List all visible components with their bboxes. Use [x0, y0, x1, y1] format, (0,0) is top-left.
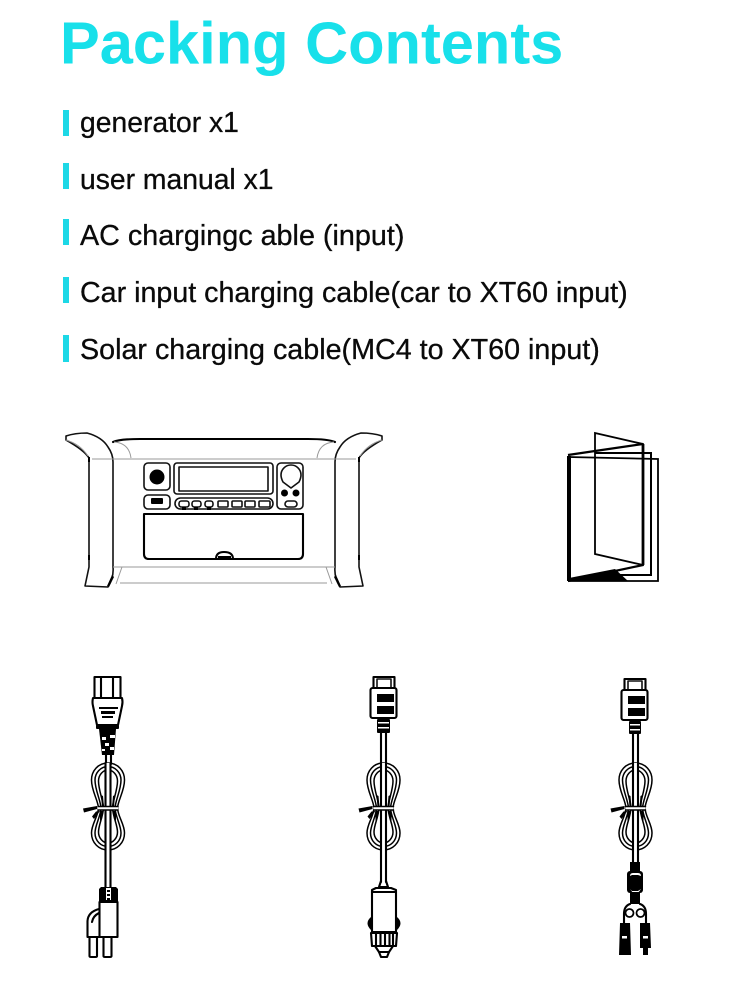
generator: display: [174, 463, 273, 494]
cable 1: coiled cable: [83, 763, 124, 887]
generator: power button: [144, 463, 170, 490]
generator: AC outlet panel: [277, 463, 303, 509]
list item: generator: generator x1: [80, 106, 239, 138]
list: packing items: [63, 106, 628, 366]
cable 2: coiled cable: [358, 763, 400, 882]
icon: generator: [66, 433, 382, 587]
list item: user manual: user manual x1: [80, 163, 273, 195]
cable 3: MC4 branch connectors: [619, 862, 651, 955]
cable 1: wall plug: [88, 887, 118, 957]
generator: storage compartment: [144, 514, 303, 559]
list item: AC charging cable: AC chargingc able (input): [80, 220, 404, 252]
title: Packing Contents: [60, 10, 563, 76]
cable 2: car cigarette plug: [368, 881, 400, 957]
icon: AC charging cable: [83, 677, 124, 957]
generator: USB port: [144, 495, 170, 509]
generator: button row: [175, 498, 273, 510]
icon: solar charging cable: [610, 679, 652, 955]
cable 3: XT60 connector: [622, 679, 648, 764]
cable 1: AC connector: [92, 677, 122, 764]
cable 3: coiled cable: [610, 763, 652, 862]
icon: user manual: [568, 433, 658, 581]
list item: car input cable: Car input charging cable(car to XT60 input): [80, 277, 628, 309]
cable 2: XT60 connector: [370, 677, 396, 764]
icon: car input charging cable: [358, 677, 400, 957]
list item: solar cable: Solar charging cable(MC4 to XT60 input): [80, 334, 600, 366]
